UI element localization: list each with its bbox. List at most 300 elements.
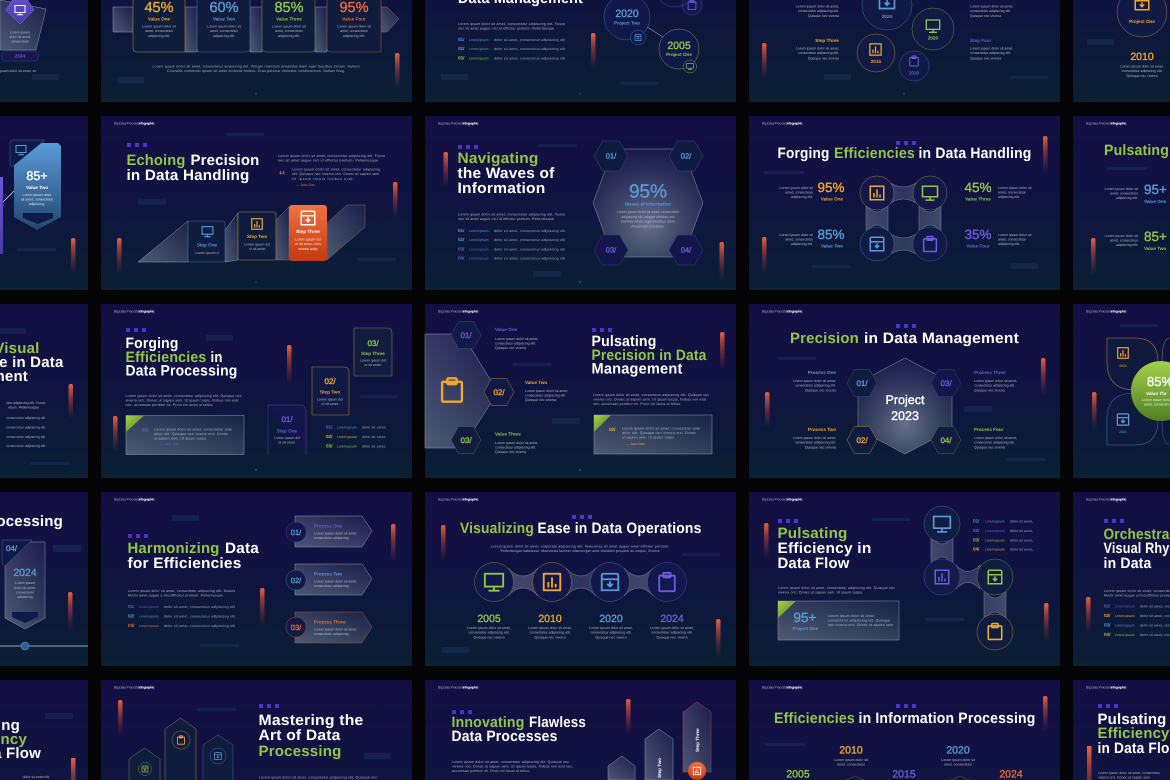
body text: Lorem ipsum dolor sit amet, consectetur adipiscing elit. Quisque nec bbox=[593, 393, 709, 397]
list: Lorem ipsum bbox=[469, 229, 489, 233]
list: 03/ bbox=[1104, 622, 1111, 628]
step text right: Quisque nec viverra bbox=[970, 14, 1001, 18]
hexagon text: pulvinar lorem, eget faucibus diam bbox=[621, 220, 675, 224]
hex 03 bbox=[451, 426, 481, 454]
process one bbox=[793, 370, 836, 392]
list: Lorem ipsum bbox=[985, 520, 1005, 524]
step card 01: Step One bbox=[277, 428, 298, 434]
circle: monitor bbox=[924, 506, 960, 542]
petal: 2024 bbox=[1107, 338, 1158, 390]
heading bbox=[126, 152, 260, 184]
value three text: Lorem ipsum dolor sit amet, bbox=[495, 441, 538, 445]
list: dolor sit amet, consectetur adipiscing elit bbox=[494, 47, 565, 51]
list: Lorem ipsum bbox=[1115, 614, 1135, 618]
header label: Infographic bbox=[462, 686, 479, 690]
panel: partial slide, year pentagon bbox=[0, 0, 88, 102]
list: Lorem ipsum bbox=[1115, 624, 1135, 628]
card text bbox=[9, 30, 31, 44]
header label bbox=[114, 310, 155, 314]
circle: archive bbox=[590, 562, 630, 602]
blue value card: adipiscing. bbox=[29, 202, 45, 206]
body text: Morbi amet augue a tincidfficitur pretiu bbox=[1104, 594, 1170, 598]
step three card: or sit amet, cons bbox=[295, 242, 321, 246]
circle: 2005: Project One bbox=[666, 52, 692, 57]
process three arrow: Lorem ipsum dolor sit amet bbox=[314, 628, 356, 632]
list: dolor sit amet, consectetur adipiscing elit bbox=[164, 614, 235, 618]
heading: in bbox=[210, 349, 222, 366]
process two bbox=[793, 427, 836, 450]
hex 01 bbox=[594, 141, 628, 171]
card: 85%: adipiscing elit. bbox=[278, 34, 300, 38]
body text bbox=[458, 22, 565, 30]
year text: consectetur adipiscing elit. bbox=[1121, 69, 1163, 73]
panel: Precision in Data Management slide bbox=[749, 304, 1060, 478]
heading bbox=[452, 714, 586, 745]
header label: Infographic bbox=[1110, 310, 1127, 314]
list: 02/ bbox=[973, 528, 980, 533]
process three: consectetur adipiscing elit. bbox=[974, 384, 1015, 388]
value 95% bbox=[780, 180, 845, 202]
value 95+ bbox=[1105, 182, 1167, 204]
value two text: Quisque nec viverra bbox=[525, 398, 556, 402]
header label bbox=[438, 686, 479, 690]
stat box: nec viverra orci. Donec ut sapien sem bbox=[828, 623, 893, 627]
list: Lorem ipsum bbox=[1115, 604, 1135, 608]
panel: four value cards slide bbox=[101, 0, 412, 102]
card: 45%: Lorem ipsum dolor sit bbox=[142, 24, 176, 28]
header label bbox=[438, 122, 479, 126]
panel: Navigating the Waves slide bbox=[425, 116, 736, 290]
heading: Data Processing bbox=[126, 362, 238, 380]
hex 01: 01/ bbox=[606, 152, 617, 160]
process four bbox=[974, 427, 1017, 450]
green circle 85%: Lorem ipsum dolo bbox=[1142, 398, 1170, 402]
stair ramps bbox=[138, 205, 365, 262]
card: 95%: Lorem ipsum dolor sit bbox=[337, 24, 371, 28]
value three text bbox=[495, 432, 538, 454]
heading: Data Processes bbox=[452, 728, 558, 745]
green circle 85%: Value Thr bbox=[1146, 391, 1167, 396]
list: Lorem ipsum bbox=[469, 248, 489, 252]
hex card: Lorem ipsum bbox=[15, 581, 35, 585]
header label bbox=[1086, 122, 1127, 126]
heading: Efficiencies bbox=[774, 710, 855, 727]
list: dolor sit amet, consectetur adipiscing elit bbox=[494, 56, 565, 60]
hex card: consectetur bbox=[16, 590, 35, 594]
value 35%: Value Four bbox=[966, 244, 990, 248]
body text: Lorem ipsum dolor sit amet, consectetur adipiscing elit. Fusce bbox=[458, 212, 565, 216]
step text left: Lorem ipsum dolor sit amet, bbox=[796, 4, 839, 8]
year text bbox=[1120, 64, 1164, 78]
hex 04: 04/ bbox=[681, 246, 692, 254]
list: 01/ bbox=[326, 424, 333, 430]
circle: 2020: Project Two bbox=[614, 20, 640, 26]
list bbox=[973, 518, 1033, 552]
list: 03/ bbox=[326, 444, 333, 448]
heading: for Efficiencies bbox=[128, 555, 242, 572]
list: 04/ bbox=[973, 546, 980, 552]
circle: chart bbox=[532, 562, 572, 602]
quote: — Jane Doe bbox=[296, 183, 315, 187]
header label: Big Data Process bbox=[438, 122, 462, 126]
year 2010: Lorem ipsum dolor sit bbox=[834, 758, 868, 762]
quote: “ bbox=[279, 169, 285, 184]
value two text: Value Two bbox=[525, 380, 547, 385]
list: 03/ bbox=[458, 246, 465, 252]
process three bbox=[974, 370, 1017, 392]
header label: Big Data Process bbox=[762, 310, 786, 314]
value three text: Value Three bbox=[495, 432, 521, 436]
heading: Precision bbox=[790, 330, 859, 347]
panel: Pulsating Precision in Data Management slide bbox=[425, 304, 736, 478]
heading: in Information Processing bbox=[858, 710, 1036, 727]
step card 01: Lorem ipsum dol bbox=[274, 436, 300, 440]
panel: partial slide project one bbox=[1073, 0, 1170, 102]
heading: in Data Management bbox=[864, 330, 1019, 347]
list: Lorem ipsum bbox=[139, 614, 159, 618]
header label bbox=[1086, 310, 1127, 314]
header label bbox=[438, 310, 479, 314]
value one text: Value One bbox=[495, 327, 518, 332]
list: dolor sit amet, consectetur adipiscing elit bbox=[164, 605, 235, 609]
step text right bbox=[970, 4, 1013, 60]
body text: viverra orci. Donec ut sapien sem. Ut ipsum turpis, finibus non erat nec, bbox=[452, 764, 573, 768]
body text bbox=[452, 760, 573, 773]
step card 02: Lorem ipsum dol bbox=[317, 398, 343, 402]
list: dolor sit amet, consectetur adipiscing elit bbox=[494, 229, 565, 233]
body text: etium. Pellentesque bbox=[8, 406, 39, 410]
card text: Lorem ipsum bbox=[10, 30, 30, 34]
process two arrow: Process Two bbox=[314, 572, 342, 576]
hexagon text: adipiscing elit. Integer ultricies orci bbox=[621, 215, 675, 219]
step three card: Lorem ipsum dol bbox=[295, 238, 321, 242]
quote box: dolor elit. Quisque nec viverra orci. Donec bbox=[154, 432, 228, 436]
arrow column blue bbox=[203, 735, 233, 780]
body text bbox=[458, 212, 565, 221]
hex 01: 01/ bbox=[460, 331, 472, 340]
step card 03: or sit amet. bbox=[364, 363, 382, 367]
arrow column step three: Step Three bbox=[695, 728, 700, 752]
year 2010: 2010 bbox=[1130, 51, 1154, 63]
panel: Innovating Flawless Data Processes slide bbox=[425, 680, 736, 780]
list: Lorem ipsum bbox=[337, 426, 357, 430]
list: dolor sit amet, con bbox=[1140, 624, 1170, 628]
card: 45%: 45% bbox=[144, 0, 174, 16]
step card 02: Step Two bbox=[320, 390, 340, 394]
body text: Lorem ipsum dolor sit amet, consectetur adipiscing elit. Quisque nec bbox=[259, 776, 377, 780]
process four: Lorem ipsum dolor sit amet, bbox=[974, 436, 1017, 440]
year 2020: 2020 bbox=[599, 613, 623, 625]
value 45% bbox=[964, 180, 1031, 202]
year 2024: 2024 bbox=[660, 613, 684, 625]
card: 95%: 95% bbox=[339, 0, 369, 16]
list: 01/ bbox=[458, 37, 465, 42]
process two: Lorem ipsum dolor sit amet, bbox=[793, 436, 836, 440]
circle: archive 2024: 2024 bbox=[882, 14, 893, 19]
process three arrow: 03/ bbox=[291, 623, 302, 632]
heading bbox=[460, 520, 702, 537]
glass arrow shape bbox=[425, 334, 498, 448]
process three arrow: Process Three bbox=[314, 620, 346, 624]
circle: chart 2015: 2015 bbox=[871, 59, 882, 64]
step card 01: or sit amet. bbox=[278, 440, 296, 444]
value 95%: Lorem ipsum dolor sit bbox=[780, 186, 813, 190]
blue value card bbox=[14, 143, 61, 230]
quote box: ut sapien sem. Ut ipsum turpis bbox=[154, 436, 206, 440]
heading: Precision bbox=[190, 152, 260, 169]
process three arrow: consectetur adipiscing bbox=[314, 632, 349, 636]
decorative squares bbox=[1104, 519, 1124, 523]
circle: 2005 bbox=[659, 29, 699, 73]
heading bbox=[258, 712, 364, 760]
big hexagon bbox=[593, 149, 703, 257]
year 2010 bbox=[528, 613, 572, 640]
decorative squares bbox=[896, 704, 916, 708]
list: dolor sit amet, con bbox=[1140, 633, 1170, 637]
process two arrow bbox=[286, 564, 372, 595]
process three arrow bbox=[286, 612, 372, 643]
heading: Mastering the bbox=[258, 712, 364, 729]
arrow head bbox=[381, 7, 399, 32]
value 95%: adipiscing elit. bbox=[791, 195, 813, 199]
step text right: Quisque nec viverra bbox=[970, 56, 1001, 60]
header label bbox=[114, 498, 155, 502]
panel: Forging Efficiencies in Data Handling slide bbox=[749, 116, 1060, 290]
quote box: 02/ bbox=[609, 427, 616, 432]
step text right: Step Four bbox=[970, 38, 992, 43]
header label: Big Data Process bbox=[438, 310, 462, 314]
heading: in Data Handling bbox=[126, 167, 250, 184]
body text: viverra orci. Donec ut sapien sem. Ut ipsum turpis, finibus non erat bbox=[126, 398, 239, 402]
value 95%: Value One bbox=[821, 196, 844, 202]
hex 01: 01/ bbox=[856, 379, 868, 388]
heading: Efficiency in bbox=[778, 540, 872, 557]
value two text: consectetur adipiscing elit. bbox=[525, 394, 566, 398]
list: dolor sit amet, bbox=[1010, 520, 1033, 524]
hexagon text bbox=[886, 393, 925, 423]
value 95%: 95% bbox=[818, 180, 845, 195]
heading: in Data bbox=[1104, 555, 1152, 572]
value one text: consectetur adipiscing elit. bbox=[495, 342, 536, 346]
process one: consectetur adipiscing elit. bbox=[795, 384, 836, 388]
panel: partial slide Pulsating values bbox=[1073, 116, 1170, 290]
petal: 2015: 2015 bbox=[1119, 430, 1127, 434]
step two card bbox=[238, 212, 276, 260]
decorative squares bbox=[572, 515, 592, 519]
heading: Visualizing bbox=[460, 520, 534, 537]
decorative squares bbox=[259, 704, 279, 708]
panel: Harmonizing Data slide bbox=[101, 492, 412, 666]
year 2024: consectetur adipiscing elit. bbox=[651, 630, 693, 634]
year 2020: 2020 bbox=[946, 744, 970, 756]
decorative squares bbox=[127, 143, 147, 147]
hex 03 bbox=[931, 370, 961, 396]
hexagon text: Project bbox=[886, 393, 925, 407]
value 95+: Value One bbox=[1144, 199, 1167, 204]
year 2024: Quisque nec viverra bbox=[656, 636, 688, 640]
heading bbox=[458, 150, 555, 197]
list: Lorem ipsum bbox=[985, 548, 1005, 552]
card text: consectetur bbox=[11, 40, 30, 44]
header label: Big Data Process bbox=[1086, 310, 1110, 314]
green circle 85% bbox=[1131, 361, 1170, 421]
quote: elit. Quisque nec viverra orci. Donec ut sapien sem bbox=[292, 172, 379, 176]
heading bbox=[1104, 526, 1170, 572]
body text: accumsan porttitor mi. Proin vel lacus ut tellus. bbox=[452, 769, 530, 773]
list: dolor sit amet, consectetur adipiscing elit bbox=[494, 38, 565, 42]
header label: Big Data Process bbox=[1086, 686, 1110, 690]
circle: clipboard bbox=[648, 562, 686, 602]
header label bbox=[438, 498, 479, 502]
heading bbox=[774, 710, 1036, 727]
card: 60%: Value Two bbox=[213, 16, 235, 22]
header label: Infographic bbox=[138, 310, 155, 314]
big hexagon bbox=[858, 358, 952, 454]
step one card: Step One bbox=[197, 242, 218, 248]
body text: ctur adipiscing elit. Fusce bbox=[6, 401, 46, 405]
list bbox=[458, 37, 565, 60]
list: dolor sit amet, bbox=[1010, 538, 1033, 542]
step text left: Lorem ipsum dolor sit amet, bbox=[796, 46, 839, 50]
year 2010: Lorem ipsum dolor sit amet, bbox=[528, 626, 572, 630]
year 2010: Quisque nec viverra bbox=[534, 636, 566, 640]
value 95%: amet, consectetur bbox=[785, 190, 814, 194]
card: 60%: Lorem ipsum dolor sit bbox=[207, 24, 241, 28]
quote: Ut ipsum turpis finibus erat. bbox=[292, 177, 354, 181]
step card 02 bbox=[312, 367, 349, 415]
hex 03: 03/ bbox=[606, 246, 617, 254]
step card 02: 02/ bbox=[324, 377, 336, 386]
hex 03 bbox=[594, 235, 628, 265]
step text left: Step Three bbox=[815, 38, 839, 43]
heading bbox=[128, 540, 259, 572]
body text: Lorem ipsum dolor sit amet, consectetur adipiscing elit. Quisque nec bbox=[778, 586, 895, 590]
step text left: consectetur adipiscing elit. bbox=[798, 9, 839, 13]
body text: Lorem ipsum dolor sit amet, consectetur bbox=[1098, 771, 1161, 775]
process two: Quisque nec viverra bbox=[805, 446, 836, 450]
step three card bbox=[289, 205, 327, 261]
process three: Process Three bbox=[974, 370, 1006, 375]
step text left: Quisque nec viverra bbox=[808, 56, 839, 60]
list: dolor sit amet, bbox=[362, 435, 386, 439]
list bbox=[1104, 604, 1170, 637]
value 85+ bbox=[1105, 229, 1167, 251]
panel: partial slide 85+ value two bbox=[0, 116, 88, 290]
year 2005: Quisque nec viverra bbox=[473, 636, 505, 640]
list: 01/ bbox=[458, 228, 465, 233]
value 35%: amet, consectetur bbox=[998, 238, 1027, 242]
process two arrow: Lorem ipsum dolor sit amet bbox=[314, 580, 356, 584]
quote box: — Jane Doe bbox=[626, 442, 645, 446]
list: Lorem ipsum bbox=[469, 256, 489, 260]
hex 01 bbox=[451, 322, 481, 348]
circle: clipboard 2010 bbox=[899, 51, 929, 81]
value 35% bbox=[964, 227, 1031, 248]
value 45%: adipiscing elit. bbox=[998, 195, 1020, 199]
value 85%: Lorem ipsum dolor sit bbox=[780, 233, 813, 237]
panel: Efficiencies in Information Processing slide bbox=[749, 680, 1060, 780]
value one text bbox=[495, 327, 538, 350]
body text bbox=[128, 589, 235, 598]
heading bbox=[126, 335, 238, 380]
list: 02/ bbox=[326, 434, 333, 439]
pentagon card bbox=[0, 0, 46, 50]
value three text: consectetur adipiscing elit. bbox=[495, 446, 536, 450]
step text right: Lorem ipsum dolor sit amet, bbox=[970, 46, 1013, 50]
header label: Big Data Process bbox=[1086, 498, 1110, 502]
heading bbox=[592, 333, 707, 378]
body text bbox=[1104, 589, 1170, 598]
process four: Process Four bbox=[974, 427, 1004, 432]
card: 95% bbox=[327, 0, 381, 52]
process one arrow: 01/ bbox=[291, 528, 302, 537]
value one text: Quisque nec viverra bbox=[495, 346, 526, 350]
arrow column step two bbox=[645, 729, 673, 780]
heading: Data Flow bbox=[778, 555, 850, 572]
heading: Data bbox=[225, 540, 259, 557]
year 2020 bbox=[941, 744, 975, 766]
list: dolor sit amet, consectetur adipiscing elit bbox=[494, 238, 565, 242]
step two card: Lorem ipsum dol bbox=[244, 242, 270, 246]
heading: Efficiency bbox=[1098, 725, 1170, 742]
header label bbox=[762, 310, 803, 314]
arrow column step three bbox=[683, 702, 711, 772]
year 2020: amet, consectetur bbox=[944, 762, 973, 766]
body text bbox=[593, 393, 709, 406]
quote bbox=[279, 168, 380, 187]
panel: Forging Efficiencies in Data Processing slide bbox=[101, 304, 412, 478]
circle: archive bbox=[977, 559, 1013, 595]
process one: Process One bbox=[808, 370, 836, 375]
value 95+: Lorem ipsum dolor sit bbox=[1105, 187, 1138, 191]
list: dolor sit amet, bbox=[362, 426, 386, 430]
step text left: Quisque nec viverra bbox=[808, 14, 839, 18]
list: Lorem ipsum bbox=[469, 56, 489, 60]
heading: Navigating bbox=[458, 150, 538, 167]
year 2010 bbox=[834, 744, 868, 766]
card: 45%: adipiscing elit. bbox=[148, 34, 170, 38]
list: consectetur adipiscing elit. bbox=[6, 416, 46, 420]
process one arrow: consectetur adipiscing bbox=[314, 536, 349, 540]
decorative squares bbox=[128, 534, 148, 538]
blue value card: Value Two bbox=[26, 185, 48, 190]
header label: Infographic bbox=[786, 310, 803, 314]
process three: Quisque nec viverra bbox=[974, 388, 1005, 392]
list: consectetur adipiscing elit. bbox=[6, 426, 46, 430]
header label: Infographic bbox=[462, 310, 479, 314]
list: 04/ bbox=[1104, 632, 1111, 637]
body text bbox=[491, 544, 669, 553]
list: Lorem ipsum bbox=[139, 624, 159, 628]
list: 01/ bbox=[128, 604, 135, 609]
body text: Lorem ipsum dolor sit amet, consectetur adipiscing elit. Fusce bbox=[278, 154, 385, 158]
list: 02/ bbox=[458, 46, 465, 51]
circle: archive bbox=[860, 227, 894, 261]
petal: 2020 partial bbox=[1162, 338, 1170, 390]
circle: chart bbox=[924, 559, 960, 595]
list: dolor sit amet, con bbox=[1140, 614, 1170, 618]
process one arrow bbox=[286, 516, 372, 547]
body text: Pellentesque habitasse. Maecenas laoreet ullamcorper ante tincidunt posuere eu neque. Viverra bbox=[500, 549, 660, 553]
hex card bbox=[2, 540, 45, 629]
list: 03/ bbox=[128, 623, 135, 628]
value two text bbox=[525, 380, 568, 402]
value 95+: adipiscing elit. bbox=[1116, 196, 1138, 200]
icon tab bbox=[10, 140, 45, 167]
quote box: Lorem ipsum dolor sit amet, consectetur ante bbox=[622, 426, 700, 430]
icon: purple diamond with monitor bbox=[6, 0, 34, 24]
stat box: Lorem ipsum dolor sit amet, bbox=[828, 614, 875, 618]
